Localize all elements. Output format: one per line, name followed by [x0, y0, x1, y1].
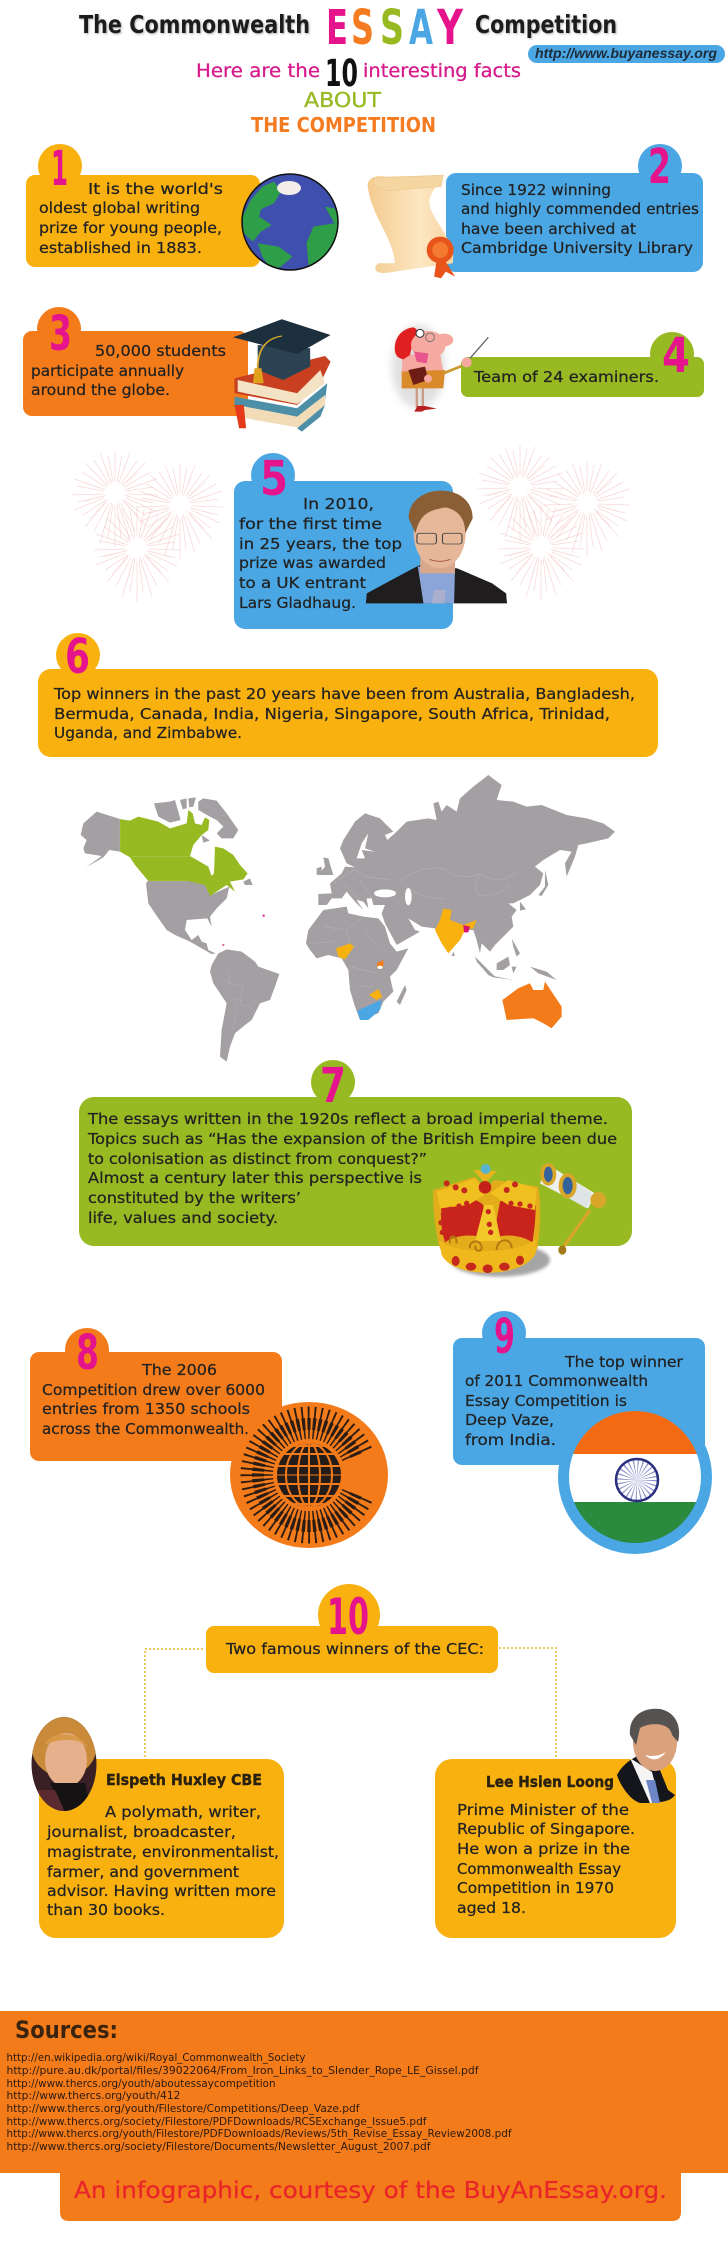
- icon: scroll with rosette: [368, 175, 455, 278]
- footer banner: An infographic, courtesy of the BuyAnEssay.org.: [74, 2178, 667, 2204]
- fact 2 text: have been archived at: [461, 220, 636, 238]
- title: [79, 10, 617, 39]
- Lee Hsien Loong text: Prime Minister of the: [457, 1801, 629, 1819]
- fact 1 text: [39, 180, 223, 257]
- fact 8 text: [42, 1361, 265, 1438]
- fact 8 text: across the Commonwealth.: [42, 1420, 249, 1438]
- name: Elspeth Huxley CBE: Elspeth Huxley CBE: [106, 1771, 262, 1789]
- fact 5 text: Lars Gladhaug.: [239, 594, 356, 612]
- connector: left dotted line: [145, 1649, 203, 1758]
- Lee Hsien Loong text: Commonwealth Essay: [457, 1860, 621, 1878]
- fact 5 text: prize was awarded: [239, 554, 386, 572]
- fact 4 text: Team of 24 examiners.: [473, 368, 659, 386]
- panel: sources: [0, 2011, 728, 2173]
- Lee Hsien Loong text: [457, 1801, 635, 1917]
- panel: fact 5: [234, 451, 507, 629]
- map: India: [435, 908, 477, 953]
- fact 2 text: Cambridge University Library: [461, 239, 693, 257]
- fact 7 text: Topics such as “Has the expansion of the British Empire been due: [87, 1130, 617, 1148]
- fact 7 text: The essays written in the 1920s reflect a broad imperial theme.: [87, 1110, 608, 1128]
- fact 6 text: Uganda, and Zimbabwe.: [54, 724, 242, 742]
- fact 9 text: The top winner: [564, 1353, 684, 1371]
- panel: Lee Hsien Loong: [435, 1709, 679, 1938]
- fact 2 text: [461, 181, 699, 257]
- panel: Elspeth Huxley: [30, 1713, 284, 1938]
- Elspeth Huxley text: A polymath, writer,: [105, 1803, 261, 1821]
- number 6: 6: [65, 629, 90, 685]
- fact 7 text: [87, 1110, 617, 1227]
- title: The Commonwealth: [79, 10, 310, 39]
- subtitle: THE COMPETITION: [251, 113, 436, 137]
- fact 5 text: [239, 495, 402, 612]
- fact 9 text: Essay Competition is: [465, 1392, 627, 1410]
- number 7: 7: [320, 1058, 346, 1114]
- subtitle: Here are the: [196, 60, 320, 82]
- source links: http://www.thercs.org/youth/412: [6, 2089, 180, 2102]
- title word: ESSAY: Y: [436, 0, 464, 56]
- icon: globe: [242, 174, 341, 270]
- Lee Hsien Loong text: Republic of Singapore.: [457, 1820, 635, 1838]
- fact 5 text: in 25 years, the top: [239, 535, 402, 553]
- number 1: 1: [51, 141, 68, 197]
- number 4: 4: [662, 328, 690, 384]
- map: Trinidad: [222, 944, 224, 946]
- fact 9 text: of 2011 Commonwealth: [465, 1372, 648, 1390]
- fact 3 text: participate annually: [31, 362, 184, 380]
- fact 1 text: prize for young people,: [39, 219, 222, 237]
- map: Zimbabwe: [369, 989, 382, 1000]
- number 9: 9: [494, 1309, 515, 1365]
- Lee Hsien Loong text: He won a prize in the: [457, 1840, 630, 1858]
- title word: ESSAY: E: [326, 0, 348, 56]
- fact 5 text: for the first time: [239, 515, 382, 533]
- source links: http://www.thercs.org/youth/aboutessaycompetition: [6, 2077, 276, 2090]
- fact 5 text: In 2010,: [303, 495, 374, 513]
- sources heading: Sources:: [15, 2016, 118, 2044]
- fact 7 text: constituted by the writers’: [88, 1189, 301, 1207]
- panel: fact 6: [38, 629, 658, 757]
- panel: fact 7: [79, 1058, 632, 1277]
- map: Uganda: [377, 960, 383, 969]
- Lee Hsien Loong text: aged 18.: [457, 1899, 526, 1917]
- map: South Africa: [357, 1000, 382, 1020]
- fact 10 text: Two famous winners of the CEC:: [225, 1640, 484, 1658]
- title word: ESSAY: A: [409, 0, 433, 56]
- fact 9 text: [465, 1353, 684, 1449]
- panel: fact 8: [30, 1325, 388, 1548]
- photo: Elspeth Huxley: [30, 1713, 98, 1812]
- source links: http://www.thercs.org/society/Filestore/Documents/Newsletter_August_2007.pdf: [6, 2140, 432, 2153]
- footer banner: [60, 2173, 681, 2221]
- number 10: 10: [327, 1588, 369, 1646]
- connector: right dotted line: [499, 1648, 556, 1758]
- icon: opera glasses: [540, 1163, 606, 1255]
- panel: fact 3: [23, 306, 331, 432]
- source links: http://en.wikipedia.org/wiki/Royal_Commonwealth_Society: [6, 2051, 306, 2064]
- title: Competition: [475, 10, 617, 39]
- fact 7 text: life, values and society.: [88, 1209, 278, 1227]
- fact 3 text: around the globe.: [31, 381, 170, 399]
- subtitle: interesting facts: [363, 60, 521, 82]
- number 3: 3: [49, 306, 72, 362]
- icon: crown: [433, 1164, 550, 1277]
- icon: teacher with pointer: [392, 325, 488, 412]
- fact 6 text: Top winners in the past 20 years have been from Australia, Bangladesh,: [53, 685, 635, 703]
- map: Canada: [120, 810, 248, 896]
- icon: India flag: [558, 1400, 712, 1554]
- decoration: fireworks left: [72, 451, 223, 602]
- fact 9 text: Deep Vaze,: [465, 1411, 554, 1429]
- map: Bermuda: [263, 915, 265, 917]
- fact 5 text: to a UK entrant: [239, 574, 366, 592]
- source links: http://www.thercs.org/youth/Filestore/Competitions/Deep_Vaze.pdf: [6, 2102, 361, 2115]
- icon: graduation cap on books: [233, 319, 331, 432]
- Elspeth Huxley text: farmer, and government: [47, 1863, 239, 1881]
- world map: [81, 775, 615, 1062]
- panel: fact 10 header: [206, 1584, 498, 1673]
- map: Nigeria: [336, 943, 354, 959]
- Lee Hsien Loong text: Competition in 1970: [457, 1879, 614, 1897]
- fact 3 text: 50,000 students: [95, 342, 226, 360]
- number 8: 8: [76, 1325, 99, 1381]
- website url pill: http://www.buyanessay.org: [535, 45, 717, 61]
- source links: [6, 2051, 513, 2153]
- fact 1 text: established in 1883.: [39, 239, 202, 257]
- map: Bangladesh: [463, 925, 470, 932]
- fact 6 text: [53, 685, 635, 742]
- Elspeth Huxley text: advisor. Having written more: [47, 1882, 276, 1900]
- subtitle: ABOUT: [304, 88, 382, 112]
- photo: Lars Gladhaug: [366, 491, 507, 603]
- source links: http://pure.au.dk/portal/files/39022064/From_Iron_Links_to_Slender_Rope_LE_Gissel.pdf: [6, 2064, 480, 2077]
- fact 1 text: It is the world's: [88, 180, 223, 198]
- name: Lee Hsien Loong: Lee Hsien Loong: [486, 1773, 614, 1791]
- Elspeth Huxley text: journalist, broadcaster,: [46, 1823, 236, 1841]
- icon: Commonwealth emblem: [230, 1402, 388, 1548]
- panel: fact 9: [453, 1309, 712, 1554]
- subtitle: 10: [325, 52, 358, 95]
- Elspeth Huxley text: than 30 books.: [47, 1901, 165, 1919]
- panel: fact 4: [461, 328, 704, 397]
- fact 8 text: entries from 1350 schools: [42, 1400, 250, 1418]
- title word: ESSAY: [326, 0, 464, 56]
- fact 7 text: Almost a century later this perspective is: [88, 1169, 422, 1187]
- fact 8 text: Competition drew over 6000: [42, 1381, 265, 1399]
- photo: Lee Hsien Loong: [617, 1709, 679, 1803]
- Elspeth Huxley text: magistrate, environmentalist,: [47, 1843, 279, 1861]
- panel: fact 1: [26, 141, 341, 270]
- map: Eurasia and Africa: [306, 775, 615, 1028]
- fact 1 text: oldest global writing: [39, 199, 200, 217]
- decoration: fireworks right: [477, 445, 630, 601]
- number 2: 2: [648, 139, 671, 195]
- fact 2 text: Since 1922 winning: [461, 181, 611, 199]
- fact 2 text: and highly commended entries: [461, 200, 699, 218]
- map: Australia: [502, 982, 562, 1028]
- subtitle: [196, 52, 521, 137]
- source links: http://www.thercs.org/society/Filestore/PDFDownloads/RCSExchange_Issue5.pdf: [6, 2115, 428, 2128]
- title word: ESSAY: S: [380, 0, 404, 56]
- fact 6 text: Bermuda, Canada, India, Nigeria, Singapore, South Africa, Trinidad,: [54, 705, 610, 723]
- source links: http://www.thercs.org/youth/Filestore/PDFDownloads/Reviews/5th_Revise_Essay_Review2008.pdf: [6, 2127, 513, 2140]
- panel: fact 2: [368, 139, 703, 278]
- Elspeth Huxley text: [46, 1803, 279, 1919]
- fact 7 text: to colonisation as distinct from conquest?”: [88, 1150, 427, 1168]
- fact 9 text: from India.: [465, 1431, 556, 1449]
- number 5: 5: [260, 451, 288, 507]
- fact 3 text: [31, 342, 226, 399]
- fact 8 text: The 2006: [141, 1361, 217, 1379]
- title word: ESSAY: S: [351, 0, 374, 56]
- map: Americas: [81, 797, 279, 1062]
